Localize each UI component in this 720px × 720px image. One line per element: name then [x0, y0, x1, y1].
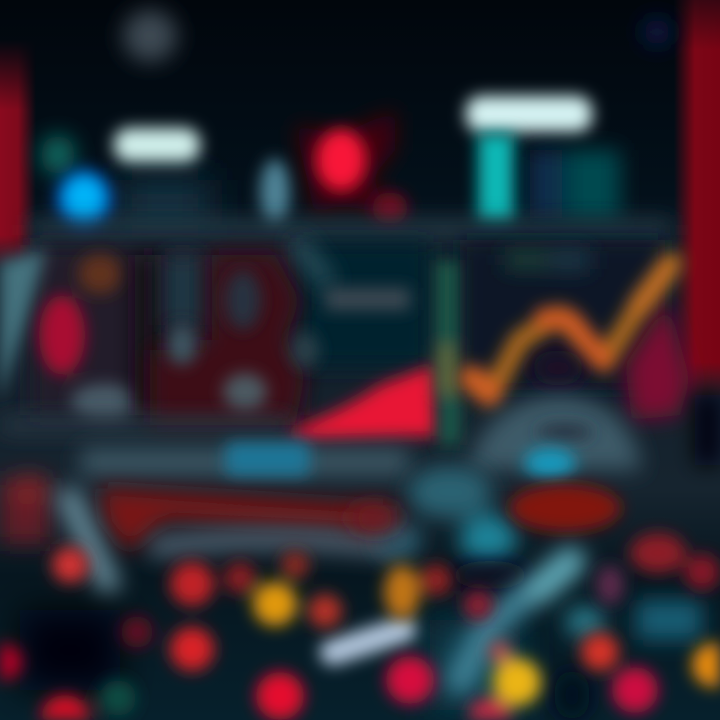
diagonal light strut — [65, 490, 112, 592]
lower dark field — [20, 610, 120, 690]
panel: left chart panel — [30, 245, 300, 415]
red blobs in left panel — [39, 254, 139, 420]
teal side shape — [565, 606, 605, 638]
grey band — [80, 448, 410, 476]
blue band highlight — [225, 442, 310, 476]
dark red band — [100, 488, 390, 552]
dark purple notch — [532, 350, 584, 386]
gauge body — [468, 395, 642, 470]
panel: left red strip — [0, 40, 36, 270]
panel: right chart panel — [460, 240, 665, 390]
white-grey pill — [316, 613, 420, 669]
dark red chart area — [625, 300, 690, 420]
left grey wedge — [0, 250, 46, 400]
grey arc band — [150, 539, 400, 548]
dark red numeral — [150, 255, 305, 425]
lower blue field — [430, 620, 520, 710]
grey-blue blob — [260, 159, 290, 225]
icon: blue glow — [56, 169, 112, 229]
dark teal columns — [530, 150, 620, 220]
black notch — [554, 670, 590, 720]
black corner block — [695, 395, 720, 465]
upper column backdrop — [120, 180, 210, 225]
upper grey rule — [0, 418, 290, 432]
white pill left — [114, 128, 200, 162]
grey lines panel — [291, 288, 410, 368]
dark gap right of gauge — [450, 561, 530, 589]
teal column — [478, 134, 514, 222]
horizontal shelf — [30, 222, 670, 238]
red area chart — [285, 365, 436, 440]
panel: right red strip — [674, 0, 720, 400]
white pill right — [466, 96, 592, 132]
teal blob — [41, 135, 75, 175]
red and yellow dots — [0, 533, 720, 720]
red fragment — [349, 504, 401, 532]
teal column in numeral gap — [165, 255, 200, 325]
gauge dark center — [537, 424, 593, 440]
dark blue accent — [643, 18, 671, 46]
dark vertical numeral — [135, 255, 161, 415]
green axis — [436, 260, 460, 445]
gauge red ellipse — [509, 484, 621, 532]
left red block — [0, 474, 50, 544]
diagonal grey stroke — [295, 240, 330, 285]
panel: dark navy middle panel — [300, 242, 430, 367]
icon: red glow with cross — [295, 110, 408, 224]
gauge blue center — [524, 448, 576, 478]
teal figure — [378, 466, 516, 566]
orange zigzag line — [472, 262, 672, 394]
teal right block — [636, 600, 702, 640]
top grey blob — [123, 10, 177, 62]
light diagonal — [460, 560, 572, 680]
grey details in numeral — [168, 270, 267, 411]
green label smudge — [505, 250, 590, 270]
